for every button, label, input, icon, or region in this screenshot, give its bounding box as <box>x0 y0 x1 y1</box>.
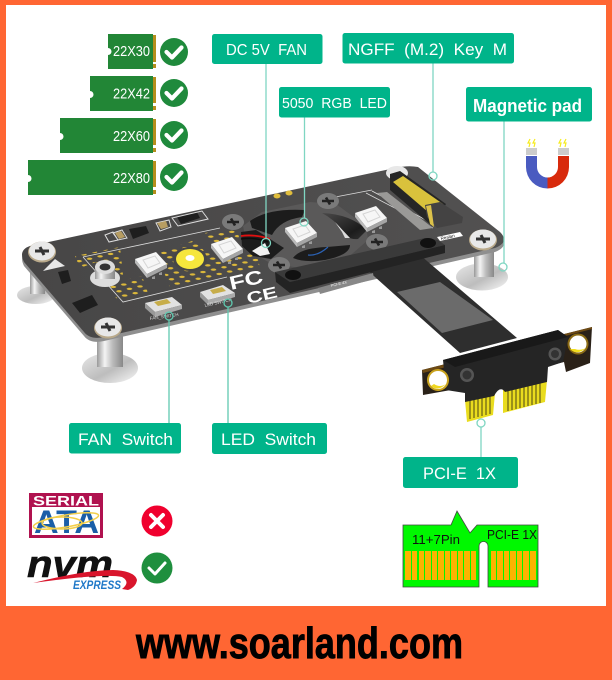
label: NGFF (M.2) Key M <box>342 33 514 64</box>
leader: FAN switch <box>165 312 173 423</box>
PCI-E 11+7 pin diagram: 11+7Pin <box>412 532 460 547</box>
label: DC 5V FAN <box>212 34 322 64</box>
footer website: www.soarland.com <box>135 619 463 668</box>
M.2 card 22X42 <box>90 76 156 111</box>
fan bracket <box>241 202 368 268</box>
gold fingers <box>465 393 495 422</box>
rear-left standoff <box>17 265 55 304</box>
tactile switches <box>145 297 182 317</box>
leader: magnetic pad <box>499 121 507 271</box>
leader: 5050 RGB LED <box>300 117 308 226</box>
yellow pad grid <box>75 228 260 300</box>
M.2 card 22X30: 22X30 <box>113 43 150 60</box>
jack <box>90 260 120 287</box>
icon: magnet <box>526 139 569 188</box>
label: 5050 RGB LED: 5050 RGB LED <box>282 95 387 112</box>
hex screws <box>460 368 474 382</box>
cable socket on board <box>275 238 445 294</box>
label: NGFF (M.2) Key M: NGFF (M.2) Key M <box>348 40 507 59</box>
leader: NGFF <box>429 63 437 180</box>
label: LED Switch <box>212 423 327 454</box>
right standoff <box>456 245 508 290</box>
icon: check 22X80 <box>160 163 188 191</box>
logo: NVM Express <box>27 544 137 592</box>
M.2 card 22X60 <box>60 118 156 153</box>
leader: DC 5V FAN <box>262 64 270 248</box>
PCB board <box>22 166 504 342</box>
icon: not supported <box>142 506 172 536</box>
small SMD parts <box>58 212 200 313</box>
icon: supported <box>142 552 172 584</box>
RGB LEDs <box>135 252 167 279</box>
label: FAN Switch: FAN Switch <box>78 430 173 449</box>
power pads <box>274 190 292 198</box>
icon: check 22X42 <box>160 79 188 107</box>
M.2 board label: Realan <box>440 233 456 241</box>
leader: PCI-E 1X <box>477 419 485 457</box>
ESD triangle <box>43 259 65 271</box>
PCI-E 11+7 pin diagram <box>403 511 538 587</box>
icon: check 22X60 <box>160 121 188 149</box>
label: PCI-E 1X: PCI-E 1X <box>423 464 496 483</box>
front-left standoff <box>82 335 138 383</box>
label: Magnetic pad <box>466 87 592 122</box>
M.2 card 22X80 <box>28 160 156 195</box>
label: 5050 RGB LED <box>279 87 390 118</box>
screws <box>28 242 56 262</box>
label: FAN Switch <box>69 423 181 454</box>
center gold pad <box>173 247 207 271</box>
M.2 card 22X30 <box>108 34 156 69</box>
PCB board: FC <box>227 267 266 295</box>
label: Magnetic pad: Magnetic pad <box>473 96 582 116</box>
logo: NVM Express: nvm <box>27 544 113 586</box>
M.2 card 22X80: 22X80 <box>113 170 150 187</box>
M.2 board label <box>437 232 463 241</box>
logo: NVM Express: EXPRESS <box>73 578 121 592</box>
PCB board: LED SWITCH <box>204 297 232 308</box>
PCB board: CE <box>245 284 280 308</box>
M.2 card 22X60: 22X60 <box>113 128 150 145</box>
ribbon cable <box>365 255 517 353</box>
label: LED Switch: LED Switch <box>221 430 316 449</box>
PCI-E 1X bracket <box>422 327 592 422</box>
logo: Serial ATA: ATA <box>34 504 99 540</box>
leader: LED switch <box>224 299 232 423</box>
M.2 card 22X42: 22X42 <box>113 86 150 102</box>
bracket holes <box>427 369 449 391</box>
icon: check 22X30 <box>160 38 188 66</box>
label: PCI-E 1X <box>403 457 518 488</box>
logo: Serial ATA <box>29 492 103 540</box>
logo: Serial ATA: SERIAL <box>33 492 100 508</box>
cable socket on board: PCI-E 4X <box>330 279 348 288</box>
label: DC 5V FAN: DC 5V FAN <box>226 42 307 59</box>
silkscreen outlines <box>83 190 437 302</box>
PCI-E 11+7 pin diagram: PCI-E 1X <box>487 527 537 542</box>
M.2 slot <box>377 166 463 230</box>
board labels: FAN_SWITCH <box>149 312 179 321</box>
